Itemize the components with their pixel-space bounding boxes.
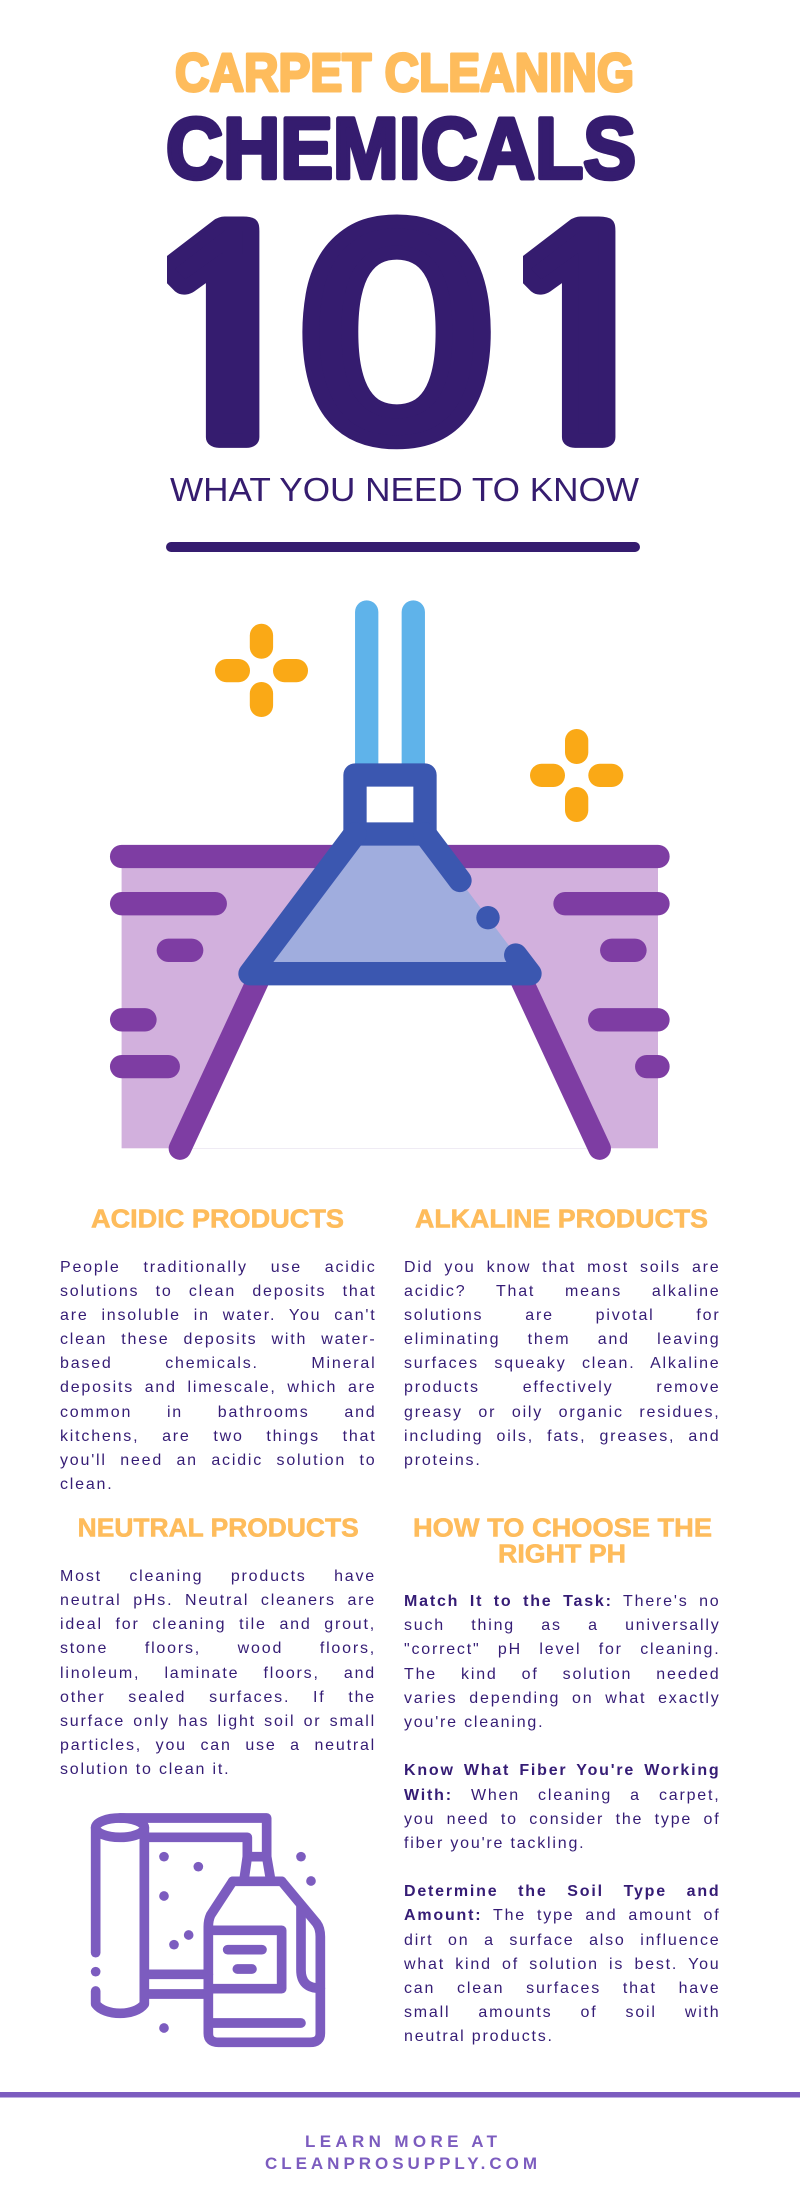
heading: acidic products: ACIDIC PRODUCTS bbox=[91, 1206, 344, 1234]
title: 101: 101 bbox=[121, 200, 685, 483]
icon: carpet roll and cleaner bottle bbox=[91, 1818, 320, 2042]
text block: how to choose the right pH: "correct" pH level for cleaning. bbox=[404, 1641, 720, 1658]
light purple carpet panel bbox=[122, 868, 658, 1148]
text block: how to choose the right pH: you're cleaning. bbox=[404, 1714, 544, 1731]
text block: neutral products: particles, you can use a neutral bbox=[60, 1737, 376, 1754]
text block: how to choose the right pH: what kind of solution is best. You bbox=[404, 1956, 720, 1973]
text block: how to choose the right pH: Determine the Soil Type and bbox=[404, 1883, 720, 1900]
text block: how to choose the right pH: Amount: The type and amount of bbox=[404, 1907, 720, 1924]
text block: acidic products: People traditionally use acidic bbox=[60, 1258, 376, 1276]
flask bubble bbox=[476, 906, 500, 929]
text block: acidic products: you'll need an acidic solution to bbox=[60, 1452, 376, 1469]
blue tubes bbox=[367, 612, 413, 770]
text block: acidic products: deposits and limescale, which are bbox=[60, 1379, 376, 1396]
title: chemicals: CHEMICALS bbox=[166, 101, 636, 197]
text block: alkaline products: Did you know that most soils are bbox=[404, 1258, 720, 1276]
flask outline bbox=[250, 775, 530, 974]
footer text bbox=[265, 2132, 537, 2173]
text block: how to choose the right pH: Know What Fiber You're Working bbox=[404, 1762, 720, 1779]
text block: neutral products: Most cleaning products have bbox=[60, 1568, 376, 1585]
text block: neutral products: ideal for cleaning tile and grout, bbox=[60, 1616, 376, 1633]
text block: alkaline products: greasy or oily organic residues, bbox=[404, 1404, 720, 1421]
text block: acidic products: kitchens, are two things that bbox=[60, 1428, 376, 1445]
text block: acidic products: based chemicals. Mineral bbox=[60, 1355, 376, 1372]
text block: alkaline products: proteins. bbox=[404, 1452, 482, 1469]
text block: acidic products bbox=[60, 1258, 376, 1493]
footer text: CLEANPROSUPPLY.COM bbox=[265, 2154, 537, 2173]
text block: alkaline products: eliminating them and leaving bbox=[404, 1331, 720, 1348]
carpet white cutout bbox=[180, 980, 600, 1148]
text block: neutral products: linoleum, laminate floors, and bbox=[60, 1665, 376, 1682]
title divider bar bbox=[166, 542, 640, 552]
text block: acidic products: clean these deposits with water- bbox=[60, 1331, 376, 1348]
text block: acidic products: solutions to clean deposits that bbox=[60, 1283, 376, 1300]
text block: how to choose the right pH: dirt on a surface also influence bbox=[404, 1932, 720, 1949]
text block: how to choose the right pH: neutral products. bbox=[404, 2028, 554, 2045]
text block: neutral products: stone floors, wood floors, bbox=[60, 1640, 376, 1657]
text block: acidic products: clean. bbox=[60, 1476, 114, 1493]
sparkle right bbox=[530, 729, 623, 822]
footer rule bbox=[0, 2092, 800, 2098]
text block: neutral products: solution to clean it. bbox=[60, 1761, 230, 1778]
text block: acidic products: common in bathrooms and bbox=[60, 1404, 376, 1421]
text block: neutral products: neutral pHs. Neutral cleaners are bbox=[60, 1592, 376, 1609]
heading: alkaline products: ALKALINE PRODUCTS bbox=[415, 1206, 708, 1234]
footer text: LEARN MORE AT bbox=[305, 2132, 498, 2151]
text block: how to choose the right pH: small amounts of soil with bbox=[404, 2004, 720, 2021]
text block: how to choose the right pH: you need to consider the type of bbox=[404, 1811, 720, 1828]
title: carpet cleaning: CARPET CLEANING bbox=[175, 43, 634, 103]
text block: acidic products: are insoluble in water. You can't bbox=[60, 1307, 376, 1324]
carpet lines bbox=[122, 856, 658, 1148]
text block: how to choose the right pH: fiber you're tackling. bbox=[404, 1835, 585, 1852]
text block: alkaline products: surfaces squeaky clean. Alkaline bbox=[404, 1355, 720, 1372]
heading: neutral products: NEUTRAL PRODUCTS bbox=[78, 1514, 359, 1542]
heading: how to choose: RIGHT PH bbox=[498, 1540, 626, 1568]
text block: neutral products: other sealed surfaces. If the bbox=[60, 1689, 376, 1706]
text block: how to choose the right pH: The kind of solution needed bbox=[404, 1666, 720, 1683]
text block: neutral products: surface only has light soil or small bbox=[60, 1713, 376, 1730]
sparkle left bbox=[215, 624, 308, 717]
text block: alkaline products: acidic? That means alkaline bbox=[404, 1283, 720, 1300]
text block: how to choose the right pH: With: When cleaning a carpet, bbox=[404, 1786, 720, 1804]
text block: neutral products bbox=[60, 1568, 376, 1778]
text block: how to choose the right pH bbox=[404, 1593, 720, 2045]
heading: how to choose: HOW TO CHOOSE THE bbox=[413, 1514, 712, 1542]
text block: alkaline products: solutions are pivotal for bbox=[404, 1307, 720, 1324]
illustration: flask on carpet bbox=[122, 612, 658, 1149]
text block: how to choose the right pH: varies depending on what exactly bbox=[404, 1690, 720, 1707]
text block: how to choose the right pH: Match It to the Task: There's no bbox=[404, 1593, 720, 1610]
text block: alkaline products: products effectively remove bbox=[404, 1379, 720, 1396]
flask liquid bbox=[250, 834, 530, 974]
text block: alkaline products: including oils, fats, greases, and bbox=[404, 1428, 720, 1445]
subtitle: WHAT YOU NEED TO KNOW bbox=[170, 471, 640, 508]
text block: alkaline products bbox=[404, 1258, 720, 1469]
heading: how to choose bbox=[413, 1514, 712, 1568]
text block: how to choose the right pH: can clean surfaces that have bbox=[404, 1980, 720, 1997]
text block: how to choose the right pH: such thing as a universally bbox=[404, 1617, 720, 1634]
